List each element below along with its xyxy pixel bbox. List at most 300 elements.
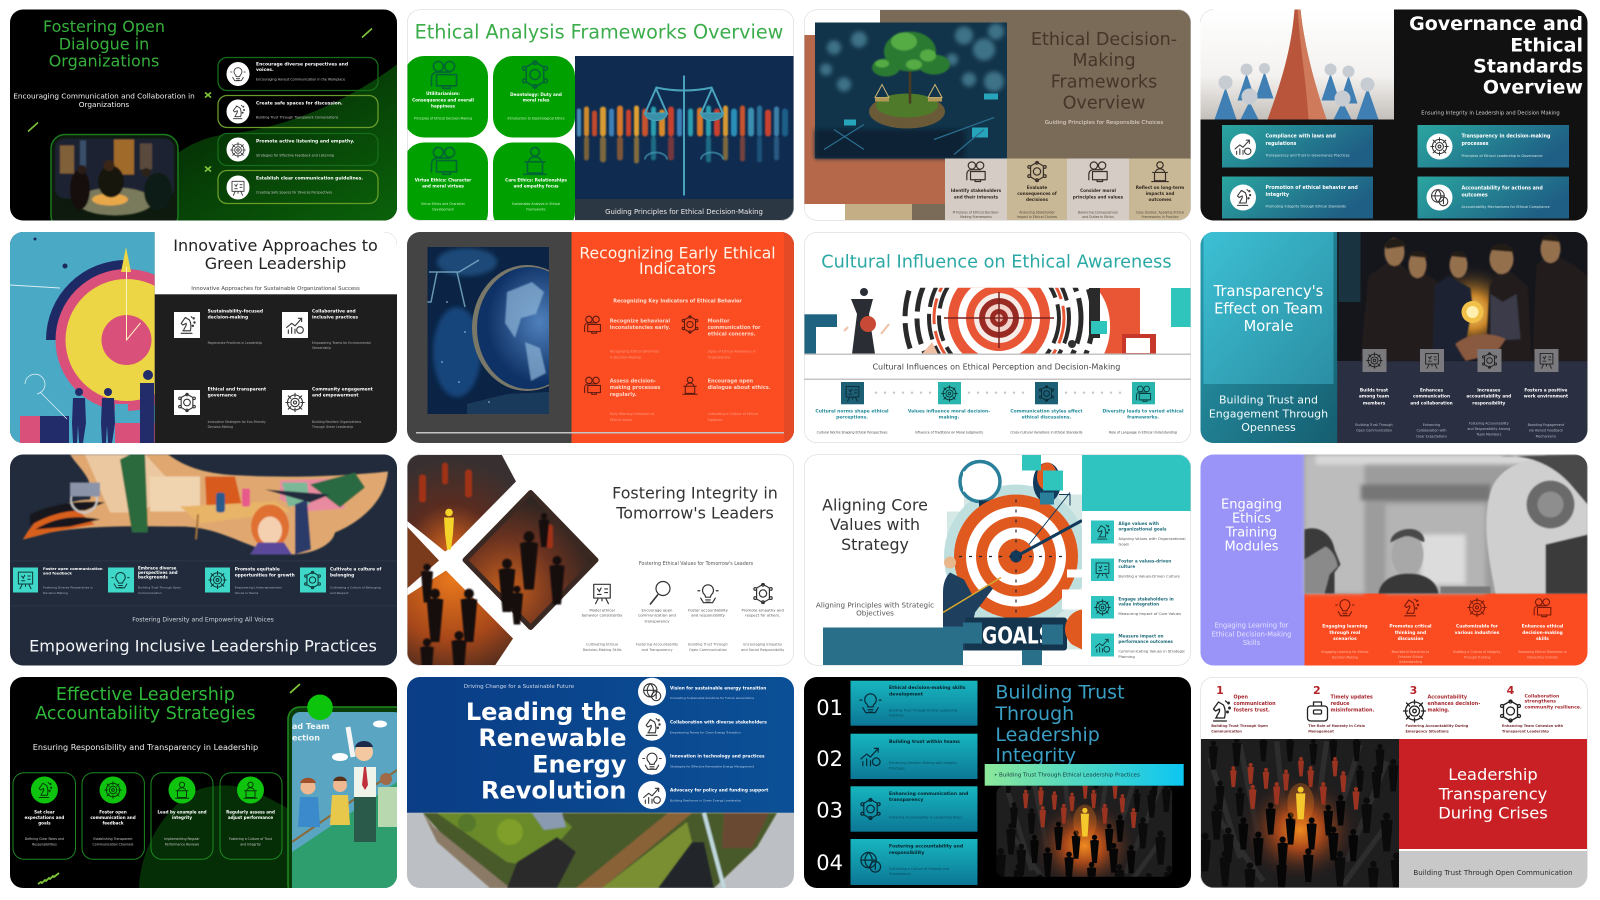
item: encourage open communication — [636, 582, 678, 652]
item: embrace diverse perspectives: Embrace diverse — [138, 566, 177, 570]
column: consider moral principles — [1067, 158, 1129, 220]
item: advocacy — [638, 781, 768, 809]
card: promotion — [1222, 176, 1373, 218]
item: behavioral inconsistencies: Recognizing Ethical Dilemmas — [610, 349, 660, 353]
item: monitor communication: communication for — [708, 325, 761, 331]
item: community engagement: Building Resilient Organizations — [312, 420, 361, 424]
subtitle: Innovative Approaches for Sustainable Organizational Success — [191, 286, 360, 292]
title: Training — [1225, 526, 1277, 540]
photo: glass globe with scales — [423, 247, 582, 414]
panel: Aligning Core Values with Strategy — [804, 454, 1191, 666]
item: sustainability-focused decision-making — [174, 308, 263, 345]
title: Engaging — [1221, 498, 1282, 512]
image: cartoon team leader: ad Team — [292, 722, 329, 731]
item 1 — [1211, 684, 1276, 733]
card: utilitarianism: Consequences and overall — [412, 98, 474, 102]
item: foster open communication: Foster open communication — [43, 566, 103, 571]
item: values-driven culture: Foster a values-driven — [1118, 559, 1171, 564]
item: equitable opportunities: Voices in Teams — [235, 591, 259, 595]
item 02 — [816, 734, 978, 779]
item 02: Building trust within teams — [889, 739, 960, 745]
item: values-driven culture: Building a Values-Driven Culture — [1118, 574, 1181, 578]
title: Green Leadership — [205, 254, 346, 273]
item 2: misinformation. — [1330, 708, 1374, 714]
card: communication guidelines: Establish clear communication guidelines. — [256, 176, 363, 182]
subtitle: Objectives — [856, 608, 894, 618]
title: Fostering Integrity in — [612, 484, 778, 502]
item 2: Management — [1308, 729, 1334, 733]
title: Strategy — [841, 535, 909, 554]
item 3: Fostering Accountability During — [1406, 724, 1469, 728]
item: monitor communication — [682, 316, 761, 359]
item: ethical and transparent governance: Ethical and transparent — [208, 387, 266, 393]
item 03: 03 — [816, 799, 843, 823]
item: embrace diverse perspectives: Building Trust Through Open — [138, 586, 181, 590]
column: identify stakeholders: Principles of Ethical Decision- — [953, 210, 999, 214]
item: builds trust: members — [1363, 400, 1386, 406]
column: identify stakeholders: Identify stakeholders — [951, 188, 1002, 193]
item 04: responsibility — [889, 850, 924, 856]
item: align values: Align values with — [1118, 521, 1159, 526]
item: builds trust: Open Communication — [1356, 429, 1392, 433]
item: ethical and transparent governance — [174, 387, 266, 429]
item: assess decision-making: Assess decision- — [610, 378, 656, 384]
item: engaging learning: scenarios — [1333, 636, 1357, 642]
column: reflect on long-term impacts: Case Studies: Applying Ethical — [1136, 210, 1184, 214]
item: promote empathy: and Social Responsibility — [741, 648, 784, 652]
title: Making — [1072, 51, 1136, 71]
item: foster accountability: Foster accountability — [688, 608, 729, 612]
item 2 — [1308, 684, 1374, 733]
card: utilitarianism: happiness — [431, 104, 456, 108]
column: consider moral principles: Consider moral — [1080, 188, 1116, 193]
item: engage stakeholders: Engage stakeholders in — [1118, 596, 1174, 601]
item: encourage open dialogue: Cultivating a Culture of Ethical — [708, 412, 758, 416]
item 04: Cultivating a Culture of Honesty and — [889, 867, 949, 871]
item: ethical and transparent governance: governance — [208, 393, 237, 399]
item: ethical and transparent governance: Decision-Making — [208, 425, 233, 429]
card: promotion: Promoting Integrity through Ethical Standards — [1266, 204, 1346, 208]
column: reflect on long-term impacts — [1129, 158, 1191, 220]
item 2: reduce — [1330, 701, 1350, 707]
card: encourage diverse perspectives — [218, 58, 378, 90]
title: Standards — [1473, 56, 1583, 78]
column: evaluate consequences: Evaluate — [1027, 185, 1047, 190]
card: accountability — [1418, 176, 1569, 218]
item 3: Accountability — [1428, 694, 1468, 700]
column: evaluate consequences: Analyzing Stakeholder — [1019, 210, 1055, 214]
item: vision: Innovating Sustainable Solutions for Future Generations — [670, 696, 754, 700]
card: foster open communication: feedback — [102, 821, 124, 826]
item 2: The Role of Honesty in Crisis — [1308, 724, 1365, 728]
panel: Recognizing Early Ethical Indicators — [407, 232, 794, 443]
title: Effect on Team — [1214, 300, 1323, 317]
title block: During Crises — [1438, 803, 1548, 822]
item: assess decision-making: making processes — [610, 385, 660, 391]
column: reflect on long-term impacts: outcomes — [1149, 197, 1172, 202]
item: community engagement — [282, 387, 373, 429]
item: increases accountability: accountability and — [1466, 394, 1511, 400]
item: equitable opportunities: Empowering Underrepresented — [235, 586, 282, 590]
item: critical thinking: thinking and — [1395, 630, 1426, 636]
card: promotion: integrity — [1266, 192, 1290, 198]
panel: Empowering Inclusive Leadership Practices — [10, 454, 397, 666]
item 4 — [1500, 684, 1582, 733]
card: accountability: Accountability Mechanisms for Ethical Compliance — [1462, 205, 1550, 209]
card: virtue ethics — [407, 142, 488, 220]
card: foster open communication — [82, 773, 144, 859]
subtitle: Skills — [1243, 639, 1261, 647]
card: deontology: Deontology: Duty and — [510, 92, 562, 97]
item: advocacy: Building Resilience in Green Energy Leadership — [670, 798, 741, 802]
item: measure impact — [1091, 634, 1185, 659]
subtitle: Recognizing Key Indicators of Ethical Behavior — [613, 298, 742, 304]
item: enhances communication: communication — [1413, 394, 1450, 400]
item: encourage open dialogue: Encourage open — [708, 378, 753, 384]
item: vision: Vision for sustainable energy transition — [670, 685, 766, 691]
item: enhances ethical decision-making: decision-making — [1522, 630, 1563, 636]
item: values influence — [908, 382, 990, 434]
item: communication styles: Cross-Cultural Variations in Ethical Standards — [1010, 430, 1083, 434]
photo: students and robot in grayscale — [1304, 454, 1588, 594]
card: virtue ethics: Virtue Ethics and Character — [421, 202, 466, 206]
item: monitor communication: ethical concerns. — [708, 332, 756, 338]
card: communication guidelines — [218, 170, 378, 204]
column: consider moral principles: and Duties in Ethics — [1082, 215, 1114, 219]
card: set clear expectations: goals — [38, 821, 51, 826]
title: Ethics — [1232, 512, 1271, 526]
yellow leader figure — [444, 509, 454, 550]
item: encourage open communication: communication and — [638, 612, 676, 618]
item: encourage open communication: Fostering Accountability — [636, 642, 678, 646]
item: collaborative and inclusive practices — [282, 308, 371, 350]
item 1: Communication — [1211, 729, 1242, 733]
item: critical thinking: Enhance Ethical — [1398, 655, 1423, 659]
photo: crowd with glowing leader — [996, 763, 1175, 900]
item: positive environment — [1524, 349, 1568, 438]
subtitle: Guiding Principles for Responsible Choices — [1045, 120, 1163, 126]
card: virtue ethics: Development — [432, 208, 454, 212]
item: cultural norms — [815, 382, 889, 434]
card: foster open communication: communication and — [90, 815, 136, 820]
item: vision — [638, 678, 766, 706]
subtitle: Building Trust and — [1219, 393, 1318, 406]
item 4: Collaboration — [1524, 693, 1559, 699]
item: promote empathy — [741, 583, 784, 652]
subtitle: Engaging Learning for — [1215, 622, 1289, 630]
title block — [1399, 739, 1588, 849]
item: embrace diverse perspectives — [108, 566, 181, 595]
title: Governance and — [1409, 13, 1583, 35]
item: communication styles: Communication styles affect — [1010, 408, 1083, 414]
item: engage stakeholders: value integration — [1118, 602, 1159, 607]
item 4: Transparent Leadership — [1502, 729, 1549, 733]
item 01: Practices — [889, 714, 904, 718]
item: collaboration: Collaboration with diverse stakeholders — [670, 719, 767, 725]
card: set clear expectations: Defining Clear Roles and — [25, 837, 64, 841]
title: Leadership — [995, 724, 1100, 746]
card: encourage diverse perspectives: Encourage diverse perspectives and — [256, 62, 348, 68]
item: engage stakeholders: Measuring Impact of Core Values — [1118, 611, 1181, 616]
item: innovation: Strategies for Effective Renewable Energy Management — [670, 764, 755, 768]
item: align values: Aligning Values with Organizational — [1118, 536, 1186, 541]
item 4: 4 — [1507, 684, 1515, 697]
card: deontology: Introduction to Deontological Ethics — [507, 116, 565, 120]
card: compliance: regulations — [1266, 141, 1296, 147]
panel: Engaging Ethics Training Modules — [1200, 454, 1588, 666]
item: diversity: Role of Language in Ethical Understanding — [1109, 430, 1177, 434]
item: model ethical behavior: Cultivating Ethical — [586, 642, 618, 646]
item: ethical and transparent governance: Innovative Strategies for Eco-Friendly — [208, 420, 266, 424]
column: evaluate consequences: Impact in Ethical Choices — [1017, 215, 1057, 219]
item: builds trust: Building Trust Through — [1355, 423, 1393, 427]
card: compliance: Transparency and Trust in Governance Practices — [1264, 154, 1350, 158]
subtitle: Aligning Principles with Strategic — [816, 600, 934, 610]
item: enhances communication — [1410, 349, 1453, 438]
item 2: Timely updates — [1330, 694, 1373, 700]
title: Integrity — [995, 745, 1076, 767]
title: Effective Leadership — [56, 685, 235, 705]
item: communication styles: ethical discussions. — [1022, 414, 1072, 420]
subtitle block — [1399, 851, 1588, 888]
card: set clear expectations: expectations and — [24, 815, 64, 820]
item: encourage open communication: and Transparency — [641, 648, 673, 652]
column: consider moral principles: principles and values — [1073, 194, 1124, 200]
card: compliance — [1222, 125, 1373, 168]
column: identify stakeholders: and their interests — [954, 194, 999, 200]
item 1: Open — [1234, 694, 1248, 700]
photo collage: figures in diamond shapes — [404, 452, 596, 682]
item: innovation — [638, 747, 765, 775]
item: builds trust: among team — [1359, 394, 1390, 400]
item: engaging learning: Engaging Learning for Ethical — [1321, 650, 1369, 654]
item: encourage open dialogue: dialogue about ethics. — [708, 385, 771, 391]
title: Accountability Strategies — [35, 704, 256, 724]
item: values-driven culture — [1091, 558, 1181, 581]
subtitle: Fostering Diversity and Empowering All Voices — [132, 616, 274, 624]
panel: Innovative Approaches to Green Leadership — [10, 232, 398, 443]
item: monitor communication: Organizations — [708, 355, 731, 359]
item: foster open communication: Decision-Making — [43, 591, 68, 595]
item: enhances ethical decision-making: Enhances ethical — [1522, 624, 1564, 630]
item: monitor communication: Signs of Ethical Awareness in — [708, 349, 756, 353]
item: community engagement: Through Green Leadership — [311, 425, 353, 429]
subtitle: Driving Change for a Sustainable Future — [464, 684, 575, 690]
card: transparency: Transparency in decision-making — [1462, 134, 1551, 140]
title: Morale — [1244, 318, 1293, 335]
title: Cultural Influence on Ethical Awareness — [821, 253, 1172, 273]
panel: Ethical Decision-Making Frameworks Overview — [804, 10, 1191, 221]
item: culture of belonging — [300, 566, 381, 595]
item 4: strengthens — [1524, 699, 1556, 705]
item: align values: Goals — [1118, 542, 1129, 546]
item 01 — [816, 681, 978, 726]
subtitle: Ensuring Integrity in Leadership and Decision Making — [1421, 110, 1560, 116]
item: positive environment: Boosting Engagement — [1528, 423, 1565, 427]
card: care ethics: Sustainable Analysis in Ethical — [512, 202, 560, 206]
item 2: 2 — [1313, 684, 1321, 697]
item: collaborative and inclusive practices: inclusive practices — [312, 314, 358, 320]
item: behavioral inconsistencies: Recognize behavioral — [610, 318, 670, 324]
decorative sparkles — [28, 28, 372, 172]
item: behavioral inconsistencies — [585, 316, 670, 359]
card: safe spaces — [218, 96, 378, 128]
item: diversity — [1102, 382, 1184, 434]
title: Fostering Open — [43, 17, 165, 36]
item: values-driven culture: culture — [1118, 564, 1135, 569]
photo: crowd with glowing leader — [1199, 735, 1403, 898]
item: collaborative and inclusive practices: Collaborative and — [312, 308, 356, 314]
subtitle: Encouraging Communication and Collaboration in — [13, 92, 195, 100]
item 01: development — [889, 692, 924, 698]
card: lead by example: Performance Reviews — [165, 843, 199, 847]
item 3: 3 — [1410, 684, 1417, 697]
photo: red cone among blue pawns — [1200, 10, 1394, 120]
divider line — [416, 432, 784, 434]
panel: Building Trust Through Leadership Integrity — [804, 677, 1191, 900]
column: evaluate consequences: consequences of — [1017, 191, 1057, 196]
item: positive environment: Fosters a positive — [1524, 387, 1568, 393]
card: transparency: processes — [1462, 141, 1489, 147]
card: care ethics: Frameworks — [526, 208, 546, 212]
card: foster open communication: Establishing Transparent — [93, 837, 133, 841]
panel: Leadership Transparency During Crises — [1199, 677, 1588, 898]
subtitle: Ethical Decision-Making — [1212, 630, 1291, 638]
title: Building Trust — [995, 681, 1125, 703]
item: values influence: Values influence moral decision- — [908, 408, 990, 414]
item: increases accountability: Team Members — [1475, 433, 1502, 437]
item: align values: organizational goals — [1118, 526, 1167, 532]
item: behavioral inconsistencies: in Decision-Making — [610, 355, 641, 359]
item 02: Enhancing Decision-Making with Integrity — [889, 761, 958, 765]
image: scales of justice and people — [575, 56, 794, 221]
item: collaboration — [638, 713, 767, 741]
card: safe spaces: Building Trust Through Transparent Conversations — [256, 116, 339, 120]
item: enhances ethical decision-making: skills — [1536, 636, 1549, 642]
item: assess decision-making: Early Warning Indicators of — [610, 412, 655, 416]
item 1: Building Trust Through Open — [1211, 724, 1268, 728]
title: Frameworks — [1051, 72, 1157, 92]
title: Indicators — [639, 260, 716, 278]
title: Renewable — [478, 724, 626, 752]
card: accountability: outcomes — [1462, 192, 1488, 198]
panel: Leading the Renewable Energy Revolution — [407, 677, 794, 889]
column: reflect on long-term impacts: Reflect on long-term — [1136, 185, 1185, 190]
item: increases accountability: and Responsibility Among — [1467, 427, 1510, 431]
item: increases accountability: responsibility — [1472, 400, 1506, 406]
item 3 — [1404, 684, 1480, 733]
item 01: Ethical decision-making skills — [889, 685, 966, 691]
item: enhances communication: Collaboration with — [1416, 429, 1447, 433]
title block: Leadership — [1448, 765, 1538, 784]
item: increases accountability — [1466, 349, 1511, 437]
item: align values — [1091, 520, 1186, 546]
item: critical thinking: Understanding — [1399, 660, 1422, 664]
subtitle: Openness — [1241, 421, 1296, 434]
connector dots — [875, 392, 1121, 394]
card: virtue ethics: and moral virtues — [422, 184, 464, 188]
item 03: Fostering Accountability in Leadership Roles — [889, 816, 962, 820]
card: set clear expectations: Set clear — [34, 809, 55, 814]
item: enhances communication: Clear Expectations — [1416, 434, 1447, 438]
title: Dialogue in — [59, 34, 149, 54]
subtitle: Organizations — [79, 100, 129, 109]
item: enhances communication: and collaboration — [1410, 400, 1453, 406]
item 3: Emergency Situations — [1406, 729, 1449, 733]
panel: Governance and Ethical Standards Overview — [1200, 10, 1588, 220]
illustration: goals target — [943, 454, 1088, 666]
title: Ethical — [1510, 34, 1583, 56]
item: critical thinking: discussion — [1398, 636, 1423, 642]
item: equitable opportunities — [205, 566, 295, 595]
item 04 — [816, 839, 978, 885]
item: communication styles — [1010, 382, 1083, 434]
card: deontology — [493, 56, 575, 138]
card: lead by example: Implementing Regular — [164, 837, 200, 841]
card: care ethics: and empathy focus — [513, 184, 559, 188]
card: set clear expectations: Responsibilities — [32, 843, 57, 847]
card: transparency: Principles of Ethical Leadership in Governance — [1462, 154, 1543, 158]
column: identify stakeholders: Making Frameworks — [960, 215, 992, 219]
panel: Fostering Integrity in Tomorrow's Leaders — [404, 452, 794, 682]
item: encourage open dialogue — [683, 377, 771, 422]
item: monitor communication: Monitor — [708, 318, 730, 324]
item: embrace diverse perspectives: backgrounds — [138, 574, 168, 580]
item: foster open communication: and feedback — [43, 570, 72, 576]
item: culture of belonging: Cultivate a culture of — [330, 566, 381, 572]
item: promote empathy: respect for others. — [745, 612, 780, 618]
item: foster open communication — [13, 566, 103, 595]
title: Energy — [532, 750, 627, 778]
item 1: 1 — [1216, 684, 1224, 697]
item: measure impact: Measure impact on — [1118, 634, 1164, 639]
title: Recognizing Early Ethical — [579, 244, 776, 262]
item: culture of belonging: Cultivating a Culture of Belonging — [330, 586, 381, 590]
item: encourage open communication: Encourage open — [642, 608, 673, 612]
item: cultural norms: Cultural Norms Shaping Ethical Perspectives — [817, 430, 888, 434]
card: care ethics — [493, 142, 575, 220]
image: cartoon team leader: ection — [292, 734, 320, 743]
title: Empowering Inclusive Leadership Practices — [29, 636, 377, 656]
item: foster accountability: Open Communication — [689, 648, 727, 652]
card: active listening: Strategies for Effective Feedback and Listening — [256, 154, 334, 158]
card: set clear expectations — [13, 773, 76, 859]
item 03: Enhancing communication and — [889, 791, 968, 797]
item: measure impact: Planning — [1118, 654, 1135, 659]
item: behavioral inconsistencies: inconsistencies early. — [610, 325, 670, 331]
highlighted subtitle bar: • Building Trust Through Ethical Leadership Practices — [994, 773, 1140, 779]
item: encourage open communication: transparency — [644, 618, 670, 624]
item: increases accountability: Fostering Accountability — [1469, 421, 1509, 425]
title: Tomorrow's Leaders — [615, 504, 774, 522]
panel: Transparency's Effect on Team Morale — [1200, 232, 1588, 443]
item 3: making. — [1428, 708, 1450, 714]
item: encourage open dialogue: Vigilance — [708, 418, 723, 422]
item 3: enhances decision- — [1428, 701, 1480, 707]
card: lead by example: integrity — [172, 815, 192, 820]
item 04: 04 — [816, 851, 843, 875]
card: regularly assess: adjust performance — [228, 815, 273, 820]
item: culture of belonging: and Respect — [330, 591, 349, 595]
item: community engagement: and empowerment — [312, 393, 358, 399]
item: cultural norms: Cultural norms shape ethical — [815, 408, 889, 414]
item: advocacy: Advocacy for policy and funding support — [670, 787, 768, 793]
item: engaging learning: Decision-Making — [1332, 656, 1358, 660]
item: enhances ethical decision-making — [1518, 599, 1567, 660]
item: assess decision-making: regularly. — [610, 392, 637, 398]
item: enhances communication: Enhances — [1420, 387, 1443, 393]
item: sustainability-focused decision-making: Regenerate Practices in Leadership — [208, 341, 262, 345]
